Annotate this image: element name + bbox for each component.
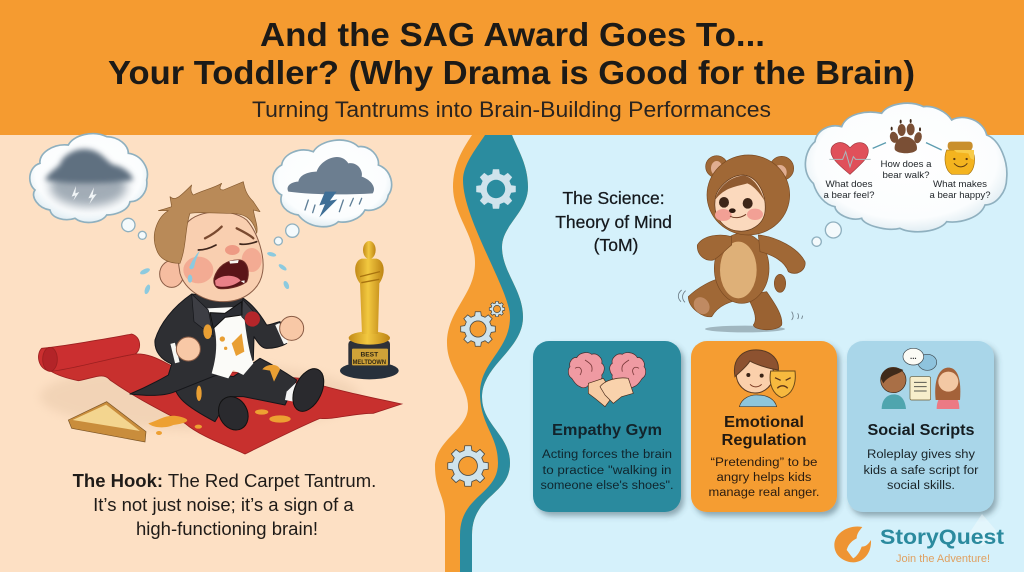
cloud labels: How does a — [880, 159, 932, 170]
card description: to practice "walking in — [542, 465, 672, 477]
shoes — [213, 364, 330, 435]
teal wave — [460, 135, 528, 572]
subtitle: Turning Tantrums into Brain-Building Performances — [252, 97, 771, 122]
cloud labels: a bear happy? — [930, 190, 990, 201]
card background — [691, 341, 837, 512]
icon: paw print — [889, 119, 923, 153]
front leg — [688, 278, 743, 317]
cloud labels: bear walk? — [882, 170, 930, 181]
red carpet — [38, 334, 402, 454]
cloud labels: What does — [826, 179, 873, 190]
right arm — [758, 235, 805, 273]
card description: angry helps kids — [716, 472, 812, 484]
toddler head — [139, 182, 290, 302]
hair — [154, 182, 260, 263]
cloud shape — [805, 103, 1007, 232]
card: Empathy Gym — [533, 341, 681, 512]
title: And the SAG Award Goes To... — [260, 16, 765, 53]
jacket — [130, 294, 287, 395]
icon: small gear — [489, 301, 505, 317]
thought cloud: right storm — [273, 140, 392, 227]
foot pad — [690, 294, 713, 317]
orange wave — [435, 135, 528, 572]
StoryQuest logo — [834, 526, 1004, 565]
brand name: StoryQuest — [880, 526, 1004, 549]
hook text: high-functioning brain! — [136, 518, 318, 539]
cloud labels: What makes — [933, 179, 987, 190]
card description: manage real anger. — [708, 487, 820, 499]
science heading: Theory of Mind — [555, 212, 672, 232]
card description: kids a safe script for — [864, 465, 979, 477]
icon: honey jar — [945, 142, 975, 174]
toast — [68, 402, 146, 442]
title — [108, 16, 915, 91]
header background — [0, 0, 1024, 135]
icon: children with script: ... — [910, 352, 917, 361]
ears — [706, 156, 794, 180]
oscar trophy: MELTDOWN — [353, 359, 386, 366]
card title — [722, 414, 806, 449]
belly — [720, 242, 757, 298]
thought bubbles: left — [122, 218, 146, 239]
thought cloud: left storm — [30, 134, 147, 222]
motion marks — [678, 290, 803, 320]
left panel background — [0, 135, 475, 572]
inner ears — [711, 161, 787, 180]
stains — [196, 324, 280, 401]
icon: heart — [829, 143, 871, 174]
icon: child with angry mask — [734, 350, 795, 407]
thought bubbles: right — [274, 224, 299, 245]
header band — [0, 0, 1024, 135]
bow tie — [210, 302, 242, 328]
body — [714, 233, 769, 303]
cuffs — [173, 324, 286, 363]
card background — [533, 341, 681, 512]
spilled juice — [148, 409, 291, 435]
card description — [864, 449, 979, 492]
sock — [285, 383, 296, 402]
eyes and brows — [198, 227, 257, 250]
card description — [540, 449, 674, 492]
toddler body — [130, 294, 330, 435]
mouth — [214, 260, 248, 289]
card: Emotional Regulation — [691, 341, 837, 512]
icon: brains and handshake — [568, 353, 646, 407]
illustration: crying toddler scene — [30, 134, 402, 454]
logo mark — [834, 527, 871, 562]
fists — [176, 316, 304, 361]
card title: Social Scripts — [868, 422, 975, 439]
science heading: (ToM) — [594, 235, 638, 255]
icon: bottom gear — [448, 446, 488, 486]
cheeks — [183, 248, 262, 283]
icon: middle gear — [461, 312, 495, 346]
watermark sparkle — [968, 514, 1000, 546]
card description: Acting forces the brain — [542, 449, 672, 461]
card description: social skills. — [887, 480, 955, 492]
tail nub — [774, 274, 786, 292]
oscar trophy: BEST — [360, 352, 378, 359]
hood — [707, 155, 790, 235]
cloud labels — [824, 159, 990, 201]
boutonniere — [245, 311, 260, 327]
card description: someone else's shoes". — [540, 480, 674, 492]
card description: Roleplay gives shy — [867, 449, 975, 461]
back leg — [747, 292, 782, 330]
trousers — [173, 358, 297, 422]
wavy divider — [435, 135, 528, 572]
nose — [225, 245, 240, 255]
science heading: The Science: — [562, 188, 665, 208]
lapels — [192, 294, 255, 337]
connector lines — [873, 143, 942, 150]
title: Your Toddler? (Why Drama is Good for the Brain) — [108, 54, 915, 91]
shadow under carpet — [40, 363, 360, 430]
ground shadow — [705, 326, 785, 332]
hook text: The Hook: The Red Carpet Tantrum. — [73, 470, 376, 491]
cloud labels: a bear feel? — [824, 190, 874, 201]
card title: Empathy Gym — [552, 422, 662, 439]
card: Social Scripts — [847, 341, 994, 512]
shirt and vest — [207, 307, 253, 378]
ear — [160, 261, 184, 287]
card title: Regulation — [722, 432, 806, 449]
card description: “Pretending” to be — [710, 457, 818, 469]
card background — [847, 341, 994, 512]
tears — [139, 251, 290, 295]
tagline: Join the Adventure! — [896, 553, 990, 565]
thought bubbles — [812, 222, 841, 246]
icon: children with script — [881, 348, 960, 409]
card description — [708, 457, 820, 499]
face — [715, 175, 765, 231]
face — [178, 212, 263, 302]
hook text: It’s not just noise; it’s a sign of a — [93, 494, 354, 515]
left arm — [697, 235, 732, 260]
illustration: child in bear costume — [678, 155, 805, 332]
icon: top gear — [476, 169, 516, 209]
bear thought cloud — [805, 103, 1007, 246]
oscar trophy — [340, 241, 399, 379]
card title: Emotional — [724, 414, 804, 431]
